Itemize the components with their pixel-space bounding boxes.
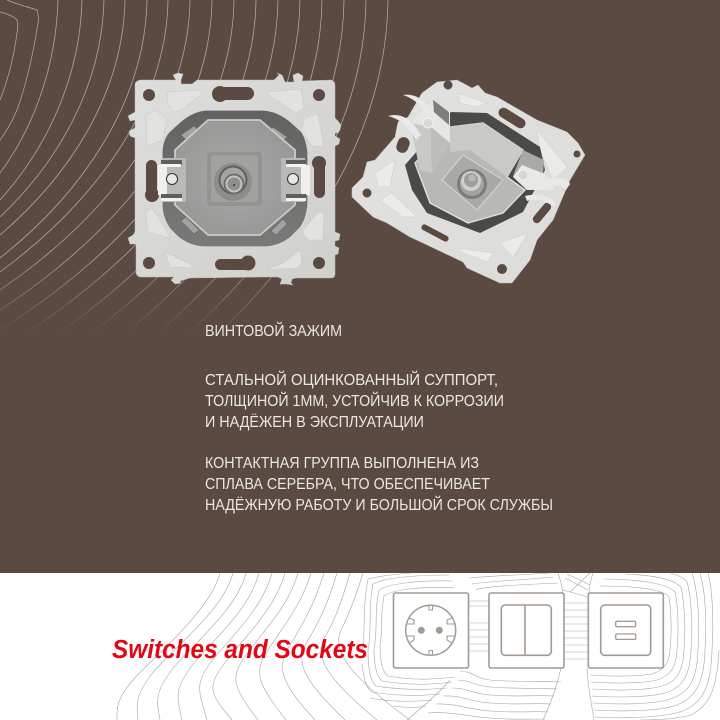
feature: contact group: КОНТАКТНАЯ ГРУППА ВЫПОЛНЕНА ИЗ (205, 455, 479, 472)
feature: steel support: ТОЛЩИНОЙ 1ММ, УСТОЙЧИВ К КОРРОЗИИ (205, 391, 504, 410)
angled coaxial connector (457, 169, 487, 199)
text block: features (205, 321, 553, 514)
product photo: socket mechanism angled view (352, 80, 585, 283)
octagonal housing (175, 120, 295, 235)
feature: steel support: И НАДЁЖЕН В ЭКСПЛУАТАЦИИ (205, 413, 424, 431)
contour lines on brown background (0, 0, 388, 495)
contours around socket (380, 587, 455, 679)
retaining clips (181, 126, 287, 235)
right bracket (513, 150, 570, 206)
angled octagonal housing (415, 123, 525, 223)
contours around third icon (590, 586, 671, 676)
feature: steel support (205, 370, 504, 431)
panel: white footer (0, 573, 720, 720)
feature: contact group (205, 455, 553, 514)
right screw terminal (281, 158, 310, 202)
feature: contact group: НАДЁЖНУЮ РАБОТУ И БОЛЬШОЙ СРОК СЛУЖБЫ (205, 495, 553, 514)
icon: USB outlet (588, 593, 663, 668)
connector base (207, 152, 262, 206)
left screw terminal (158, 158, 186, 202)
angled connector base (442, 155, 503, 210)
angled recess (405, 112, 545, 233)
left bracket (388, 95, 450, 173)
feature: screw clamp: ВИНТОВОЙ ЗАЖИМ (205, 321, 342, 340)
icon: double switch (489, 593, 564, 668)
coaxial connector (214, 163, 252, 201)
angled plate facets (375, 93, 567, 262)
contours below icons (460, 671, 561, 682)
feature: contact group: СПЛАВА СЕРЕБРА, ЧТО ОБЕСПЕЧИВАЕТ (205, 476, 490, 493)
panel: brown background (0, 0, 720, 573)
angled mounting holes (362, 80, 580, 274)
embossed plate facets (146, 89, 324, 270)
contour lines on white footer (117, 573, 719, 720)
horizontal contours between icons (468, 601, 490, 651)
icon: socket (394, 593, 468, 668)
angled mounting plate (352, 80, 585, 283)
feature: steel support: СТАЛЬНОЙ ОЦИНКОВАННЫЙ СУППОРТ, (205, 370, 498, 389)
dark recess (162, 110, 308, 247)
footer title: Switches and Sockets (112, 636, 368, 664)
mounting holes (143, 86, 326, 270)
mounting plate (128, 73, 341, 285)
product photo: socket mechanism front view (128, 73, 341, 285)
diagonal ridges (407, 680, 450, 720)
